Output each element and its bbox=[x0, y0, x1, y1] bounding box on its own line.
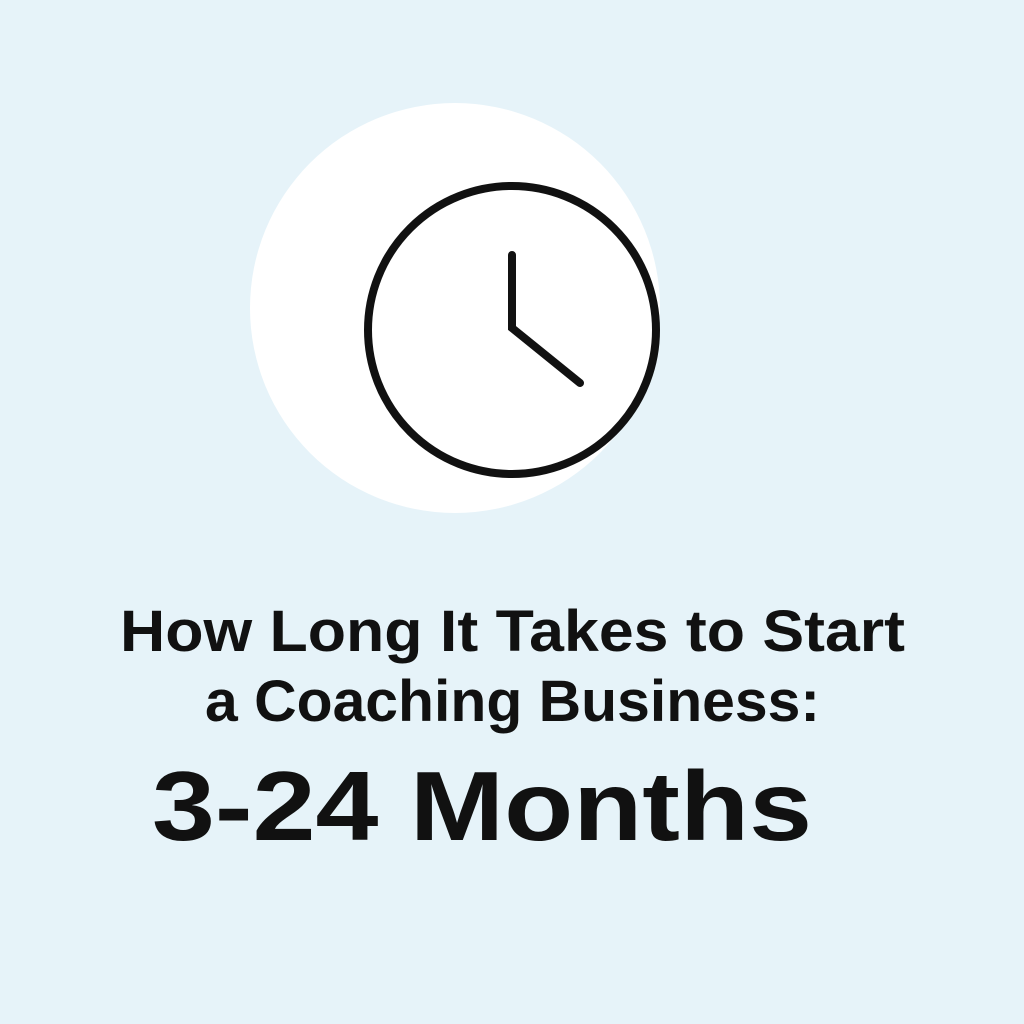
title: a Coaching Business: bbox=[205, 669, 820, 734]
headline number: 3-24 Months: 3-24 Months bbox=[152, 751, 812, 861]
icon: clock bbox=[368, 186, 656, 474]
title: How Long It Takes to Start bbox=[120, 599, 905, 664]
white background circle bbox=[250, 103, 660, 513]
title bbox=[120, 599, 905, 734]
